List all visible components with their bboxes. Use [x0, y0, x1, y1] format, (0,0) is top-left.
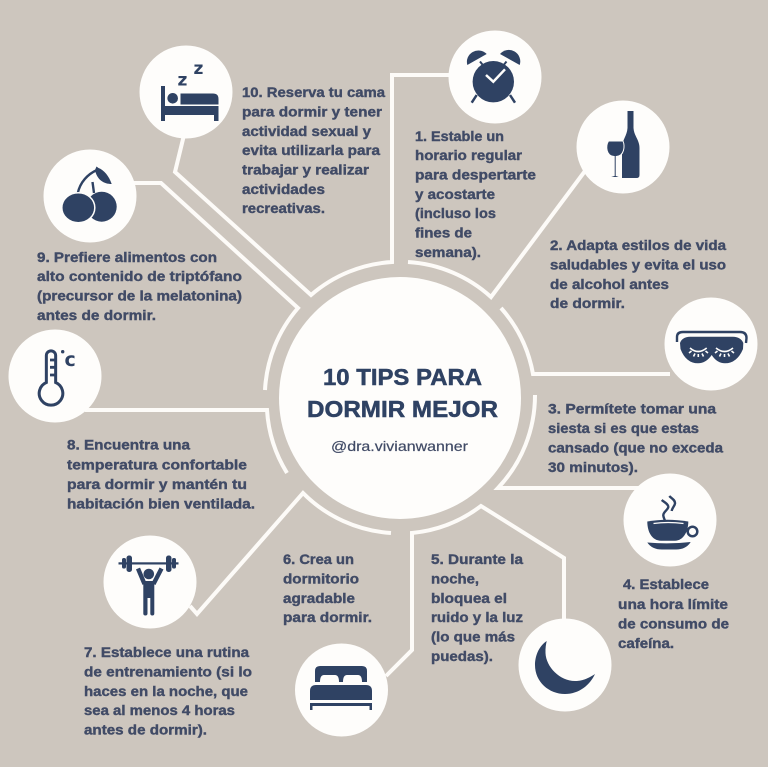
text: tip 6: para dormir.	[283, 609, 372, 625]
tip 10	[140, 46, 385, 216]
text: tip 5: bloquea el	[431, 590, 507, 606]
icon: person sleeping in bed: z	[178, 71, 188, 91]
icon: double bed	[295, 644, 388, 736]
text: tip 3: 3. Permítete tomar una	[548, 400, 716, 416]
text: tip 8: para dormir y mantén tu	[67, 476, 247, 492]
text: tip 5: ruido y la luz	[431, 609, 523, 625]
text: tip 8: 8. Encuentra una	[67, 436, 190, 452]
text: tip 7: 7. Establece una rutina	[84, 644, 249, 660]
icon: person lifting weights	[104, 536, 196, 628]
tip 3	[548, 298, 758, 475]
connector: tip 4	[498, 395, 640, 488]
centre panel	[279, 277, 521, 519]
text: tip 3: 30 minutos).	[548, 459, 638, 475]
text: tip 10: evita utilizarla para	[242, 142, 380, 158]
icon: wine bottle and glass	[576, 100, 670, 194]
text: tip 5: (lo que más	[431, 628, 515, 644]
text: tip 5: noche,	[431, 570, 479, 586]
title: DORMIR MEJOR	[307, 396, 498, 422]
text: tip 10: 10. Reserva tu cama	[242, 84, 385, 100]
text: tip 4	[618, 576, 729, 651]
tip 5	[431, 551, 612, 712]
connector: tip 3	[501, 308, 670, 374]
text: tip 10: actividad sexual y	[242, 123, 371, 139]
icon: cherries	[44, 150, 136, 242]
text: tip 3: siesta si es que estas	[548, 420, 699, 436]
text: tip 1: horario regular	[415, 147, 523, 163]
icon: alarm clock	[448, 30, 542, 124]
tip 1	[415, 30, 542, 260]
connector: tip 5 and 6	[386, 506, 564, 676]
text: tip 9: 9. Prefiere alimentos con	[37, 249, 217, 265]
centre circle	[279, 277, 521, 519]
text: tip 2: de alcohol antes	[550, 276, 669, 292]
text: tip 2: 2. Adapta estilos de vida	[550, 237, 726, 253]
text: tip 9: alto contenido de triptófano	[37, 268, 242, 284]
text: tip 10: actividades	[242, 181, 325, 197]
text: tip 6: agradable	[283, 590, 355, 606]
text: tip 8	[67, 436, 255, 512]
text: tip 2: de dormir.	[550, 295, 625, 311]
tip 9	[37, 150, 242, 323]
text: tip 9: (precursor de la melatonina)	[37, 288, 242, 304]
text: tip 2	[550, 237, 726, 311]
tip 8	[8, 330, 255, 512]
text: tip 8: temperatura confortable	[67, 456, 247, 472]
tip 4	[618, 474, 729, 651]
connector: tip 9	[130, 183, 298, 390]
text: tip 7: antes de dormir).	[84, 722, 207, 738]
icon: sleep mask	[664, 298, 758, 390]
text: tip 1	[415, 128, 536, 260]
text: tip 4: 4. Establece	[623, 576, 709, 592]
text: tip 6: 6. Crea un	[283, 551, 354, 567]
icon: thermometer: c	[64, 349, 76, 371]
title: 10 TIPS PARA	[323, 364, 482, 390]
text: tip 1: semana).	[415, 244, 481, 260]
connector: tips 10 and 1	[175, 75, 450, 295]
text: tip 9: antes de dormir.	[37, 307, 156, 323]
text: tip 1: 1. Estable un	[415, 128, 504, 144]
tip 7	[84, 536, 252, 738]
handle: @dra.vivianwanner	[331, 438, 468, 454]
text: tip 7	[84, 644, 252, 738]
icon: coffee cup	[624, 474, 716, 566]
text: tip 4: de consumo de	[618, 616, 729, 632]
connector: tip 8	[85, 410, 287, 473]
icon: person sleeping in bed: z	[194, 59, 204, 79]
connectors: ring of branches around the centre	[85, 75, 670, 676]
text: tip 6	[283, 551, 372, 625]
connector: tip 7	[190, 493, 391, 614]
text: tip 6: dormitorio	[283, 570, 359, 586]
text: tip 3	[548, 400, 723, 475]
text: tip 10: para dormir y tener	[242, 104, 383, 120]
text: tip 8: habitación bien ventilada.	[67, 496, 255, 512]
text: tip 4: una hora límite	[618, 596, 728, 612]
text: tip 9	[37, 249, 242, 323]
text: tip 1: (incluso los	[415, 205, 496, 221]
text: tip 2: saludables y evita el uso	[550, 256, 726, 272]
icon: person sleeping in bed	[140, 46, 232, 138]
icon: crescent moon	[518, 618, 612, 712]
icon: thermometer	[8, 330, 102, 422]
connector: tip 2	[408, 171, 585, 297]
tip 6	[283, 551, 388, 736]
text: tip 3: cansado (que no exceda	[548, 440, 723, 456]
text: tip 7: sea al menos 4 horas	[84, 702, 235, 718]
text: tip 5: puedas).	[431, 648, 493, 664]
text: tip 5	[431, 551, 523, 664]
text: tip 10: recreativas.	[242, 200, 325, 216]
tip 2	[550, 100, 726, 311]
text: tip 7: de entrenamiento (si lo	[84, 664, 252, 680]
text: tip 10: trabajar y realizar	[242, 162, 370, 178]
text: tip 1: y acostarte	[415, 186, 495, 202]
title	[307, 364, 498, 422]
text: tip 1: para despertarte	[415, 166, 536, 182]
text: tip 5: 5. Durante la	[431, 551, 523, 567]
text: tip 7: haces en la noche, que	[84, 683, 248, 699]
text: tip 4: cafeína.	[618, 635, 674, 651]
text: tip 10	[242, 84, 385, 216]
text: tip 1: fines de	[415, 224, 472, 240]
